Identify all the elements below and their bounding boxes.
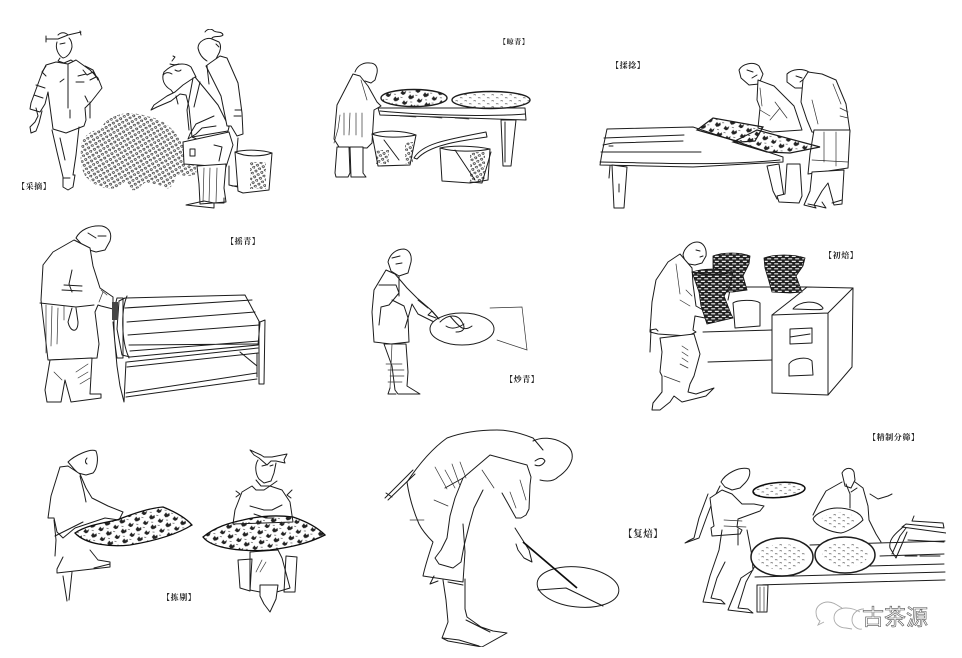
illustration: woman standing with headdress [30, 31, 102, 190]
scene: pan firing [372, 249, 539, 394]
label: sorting: 【拣剔】 [162, 592, 196, 602]
label: withering: 【晾青】 [499, 37, 529, 46]
illustration: bending worker [385, 430, 572, 647]
illustration: seated sorter [233, 450, 297, 612]
label: picking: 【采摘】 [17, 181, 51, 191]
illustration: stove [703, 287, 853, 395]
illustration: worker at table [334, 63, 381, 177]
illustration: rolling trays [697, 118, 820, 153]
illustration: worker carrying basket [650, 242, 733, 410]
scene: second baking [385, 430, 663, 647]
scene: picking tea [17, 29, 272, 208]
illustration: raised sieve [753, 481, 805, 499]
label: first baking: 【初焙】 [824, 250, 858, 260]
illustration: left tray of leaves [75, 507, 192, 546]
illustration: woman standing behind [198, 29, 243, 187]
illustration: right tray of leaves [203, 516, 325, 551]
illustration: ladle and round basket [523, 542, 621, 611]
illustration: table with round sieves [751, 537, 945, 612]
illustration: table [378, 108, 526, 166]
illustration: drying trays [381, 90, 530, 108]
illustration: worker tilting sieve [813, 468, 892, 542]
illustration: pan on stove [428, 307, 527, 350]
watermark: Wechat account logo and name [816, 602, 928, 630]
scene: sorting [48, 450, 325, 612]
illustration: two baskets with carrying pole [372, 131, 491, 183]
illustration: woman bending over pile [151, 56, 233, 208]
scene: tossing drum [40, 226, 265, 402]
label: second baking: 【复焙】 [623, 528, 663, 540]
scene: sun withering [334, 37, 530, 183]
scene: rolling top right [600, 60, 850, 208]
scene: first baking [650, 242, 858, 410]
illustration: stacked jars [890, 516, 946, 558]
illustration: table [600, 127, 784, 208]
label: firing: 【炒青】 [505, 374, 539, 384]
label: rolling: 【揉捻】 [611, 60, 645, 70]
illustration: worker holding sieve [685, 468, 764, 613]
illustration: two workers rolling [739, 63, 850, 208]
illustration: tossing drum machine [112, 295, 265, 402]
label: refining and sieving: 【精制分筛】 [868, 432, 920, 442]
watermark: Wechat account logo and name: 古茶源 [862, 605, 928, 630]
illustration: worker with pan [372, 249, 438, 394]
illustration: worker at drum [40, 226, 113, 402]
illustration: basket of leaves [235, 150, 272, 193]
illustration: baskets on stove [713, 253, 805, 293]
illustration: standing sorter [48, 450, 123, 601]
label: tossing: 【摇青】 [226, 236, 260, 246]
scene: refining and sieving [685, 432, 946, 630]
illustration: tea leaf pile [81, 113, 196, 190]
